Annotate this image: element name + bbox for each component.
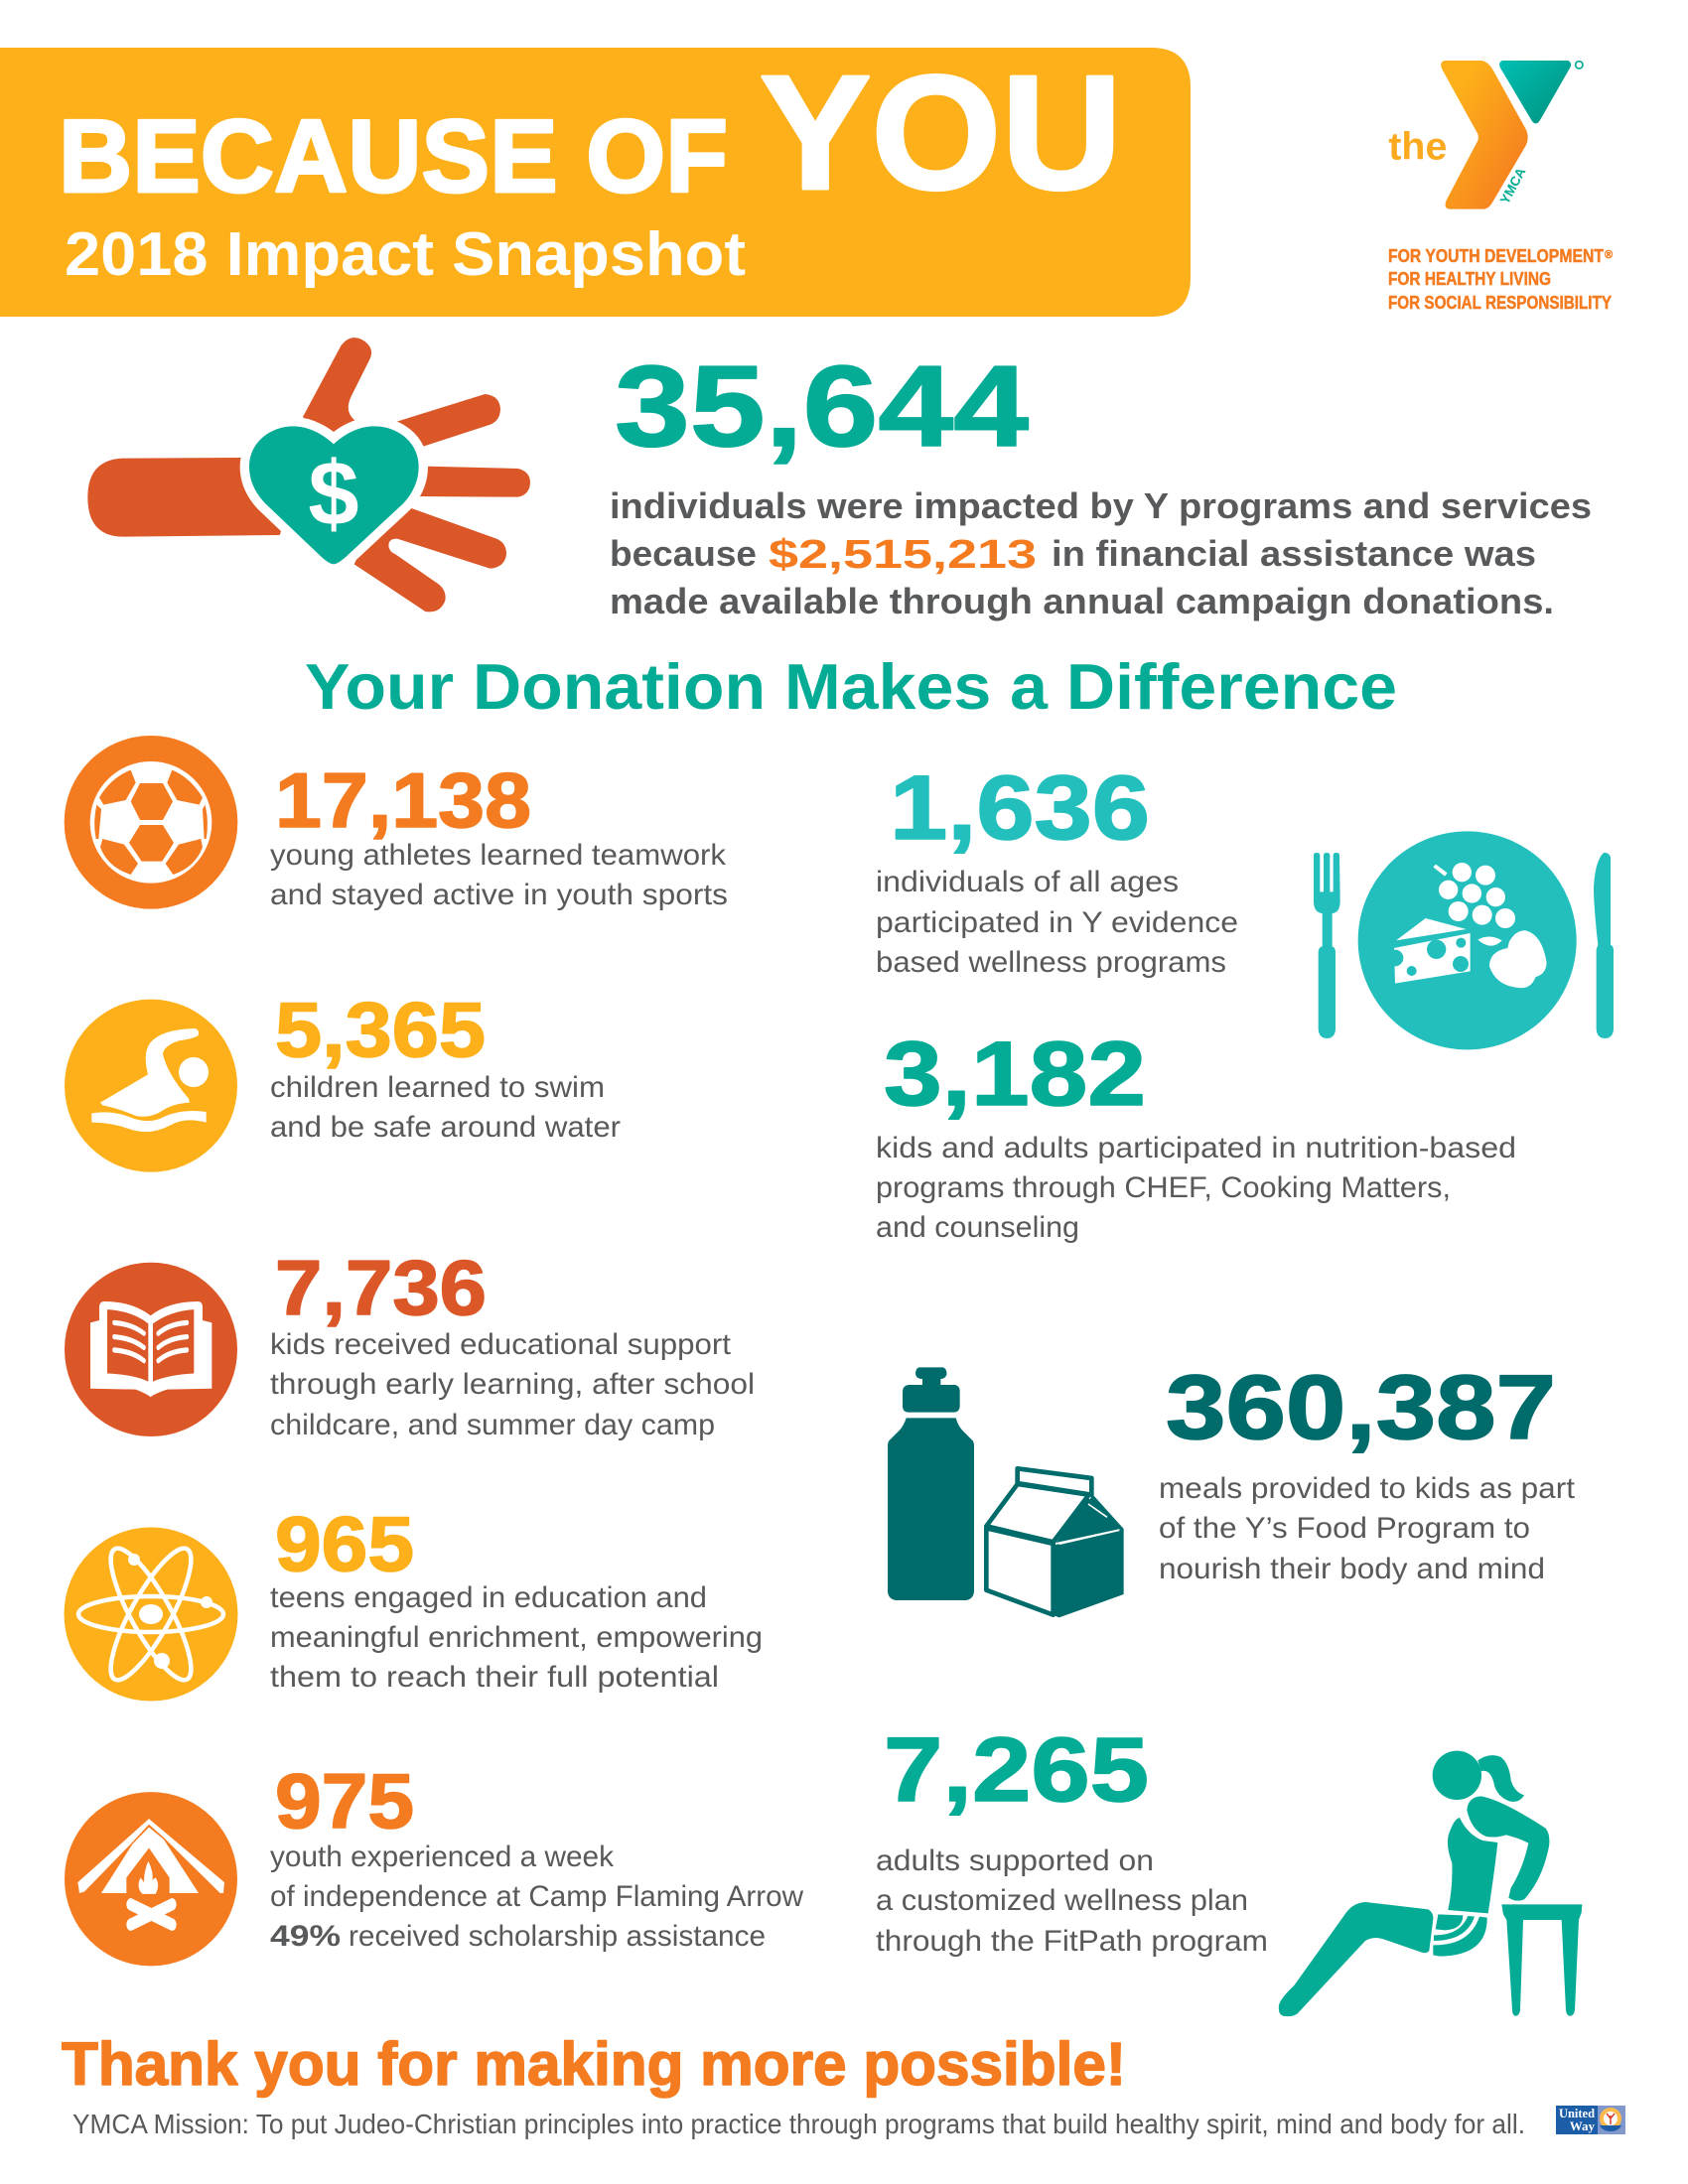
description: teens engaged in education and: [270, 1581, 707, 1614]
panel: food program meals: [888, 1357, 1576, 1617]
description: and stayed active in youth sports: [270, 879, 728, 911]
logo: United Way: Way: [1570, 2118, 1595, 2133]
description: kids received educational support: [270, 1328, 732, 1361]
stat number: 7,736: [275, 1244, 487, 1331]
stat number: 3,182: [884, 1024, 1146, 1125]
stat number: 5,365: [275, 986, 486, 1073]
description: participated in Y evidence: [876, 906, 1238, 939]
description: [876, 1132, 1516, 1244]
description: youth experienced a week: [270, 1841, 615, 1873]
icon: soccer ball: [65, 736, 237, 909]
logo word: the: the: [1388, 125, 1447, 169]
stat number: 975: [275, 1757, 414, 1844]
text block: financial assistance: in financial assistance was: [1052, 533, 1536, 574]
mission statement: YMCA Mission: To put Judeo-Christian principles into practice through programs that build healthy spirit, mind and body for all.: [72, 2109, 1525, 2139]
heading: Your Donation Makes a Difference: [305, 650, 1397, 723]
panel: nutrition programs: [876, 1024, 1516, 1244]
description: of independence at Camp Flaming Arrow: [270, 1880, 803, 1913]
description: them to reach their full potential: [270, 1661, 719, 1694]
logo tagline: [1388, 246, 1613, 313]
description: 49%: [270, 1920, 341, 1953]
panel: camp: [65, 1757, 803, 1966]
description: nourish their body and mind: [1159, 1553, 1545, 1585]
description: adults supported on: [876, 1844, 1154, 1877]
logo: the Y: [1388, 61, 1613, 313]
panel: wellness programs: [876, 757, 1614, 1049]
icon: hand with heart and dollar sign: $: [308, 444, 359, 545]
icon: woman exercising on chair: [1279, 1751, 1582, 2016]
title: because of you: BECAUSE OF: [59, 99, 728, 214]
description: [876, 1844, 1268, 1958]
icon: plate of food with fork and knife: [1314, 831, 1614, 1049]
logo: United Way: [1556, 2106, 1625, 2134]
description: young athletes learned teamwork: [270, 839, 727, 872]
stat: 35,644 individuals: 35,644: [615, 341, 1029, 471]
logo tagline: ®: [1605, 249, 1613, 261]
panel: youth sports: [65, 736, 728, 911]
description: meaningful enrichment, empowering: [270, 1621, 763, 1654]
registered mark: [1576, 62, 1583, 68]
stat number: 360,387: [1166, 1357, 1556, 1458]
logo tagline: FOR SOCIAL RESPONSIBILITY: [1388, 293, 1612, 313]
description: [270, 1328, 755, 1441]
panel: header banner: [0, 42, 1191, 317]
description: and counseling: [876, 1211, 1079, 1244]
description: children learned to swim: [270, 1071, 605, 1104]
icon: orange Y chevron: [1441, 61, 1528, 209]
logo tagline: FOR YOUTH DEVELOPMENT: [1388, 246, 1604, 266]
icon: tent with campfire: [65, 1792, 237, 1966]
description: programs through CHEF, Cooking Matters,: [876, 1171, 1451, 1204]
text block: financial assistance: $2,515,213: [769, 531, 1037, 577]
description: [1159, 1472, 1576, 1585]
description: received scholarship assistance: [349, 1920, 766, 1953]
description: through the FitPath program: [876, 1925, 1268, 1958]
thank you message: Thank you for making more possible!: [62, 2030, 1126, 2098]
text block: financial assistance: individuals were impacted by Y programs and services: [610, 485, 1592, 526]
text block: financial assistance: because: [610, 533, 757, 574]
description: and be safe around water: [270, 1111, 621, 1144]
icon: open book: [65, 1263, 237, 1436]
stat number: 17,138: [275, 756, 531, 844]
title: because of you: YOU: [760, 42, 1122, 223]
logo: United Way: United: [1559, 2106, 1596, 2120]
stat number: 1,636: [890, 757, 1150, 859]
stat: 35,644 individuals: [610, 341, 1592, 621]
description: a customized wellness plan: [876, 1884, 1248, 1917]
text block: financial assistance: made available through annual campaign donations.: [610, 581, 1554, 621]
panel: teen enrichment: [64, 1500, 763, 1702]
panel: FitPath: [876, 1719, 1582, 2016]
subtitle: 2018 Impact Snapshot: [65, 220, 746, 289]
description: [270, 1841, 803, 1953]
icon: teal Y triangle: [1499, 61, 1571, 123]
description: individuals of all ages: [876, 866, 1179, 898]
text block: financial assistance: [610, 485, 1592, 621]
logo tagline: FOR HEALTHY LIVING: [1388, 269, 1551, 289]
title: because of you: [59, 42, 1122, 223]
description: meals provided to kids as part: [1159, 1472, 1576, 1505]
panel: swimming: [65, 986, 621, 1172]
icon: swimmer: [65, 1000, 237, 1172]
description: kids and adults participated in nutrition-based: [876, 1132, 1516, 1164]
description: childcare, and summer day camp: [270, 1409, 715, 1441]
description: based wellness programs: [876, 946, 1226, 979]
stat number: 7,265: [884, 1719, 1149, 1821]
logo word: YMCA: YMCA: [1497, 165, 1529, 206]
stat number: 965: [275, 1500, 414, 1587]
description: [270, 1581, 763, 1694]
description: of the Y’s Food Program to: [1159, 1512, 1530, 1545]
description: [270, 839, 728, 911]
icon: atom: [64, 1527, 238, 1702]
panel: education: [65, 1244, 755, 1441]
icon: water bottle and milk carton: [888, 1367, 1124, 1617]
description: [876, 866, 1238, 979]
description: through early learning, after school: [270, 1368, 755, 1401]
icon: hand with heart and dollar sign: [87, 338, 530, 612]
description: [270, 1071, 621, 1144]
